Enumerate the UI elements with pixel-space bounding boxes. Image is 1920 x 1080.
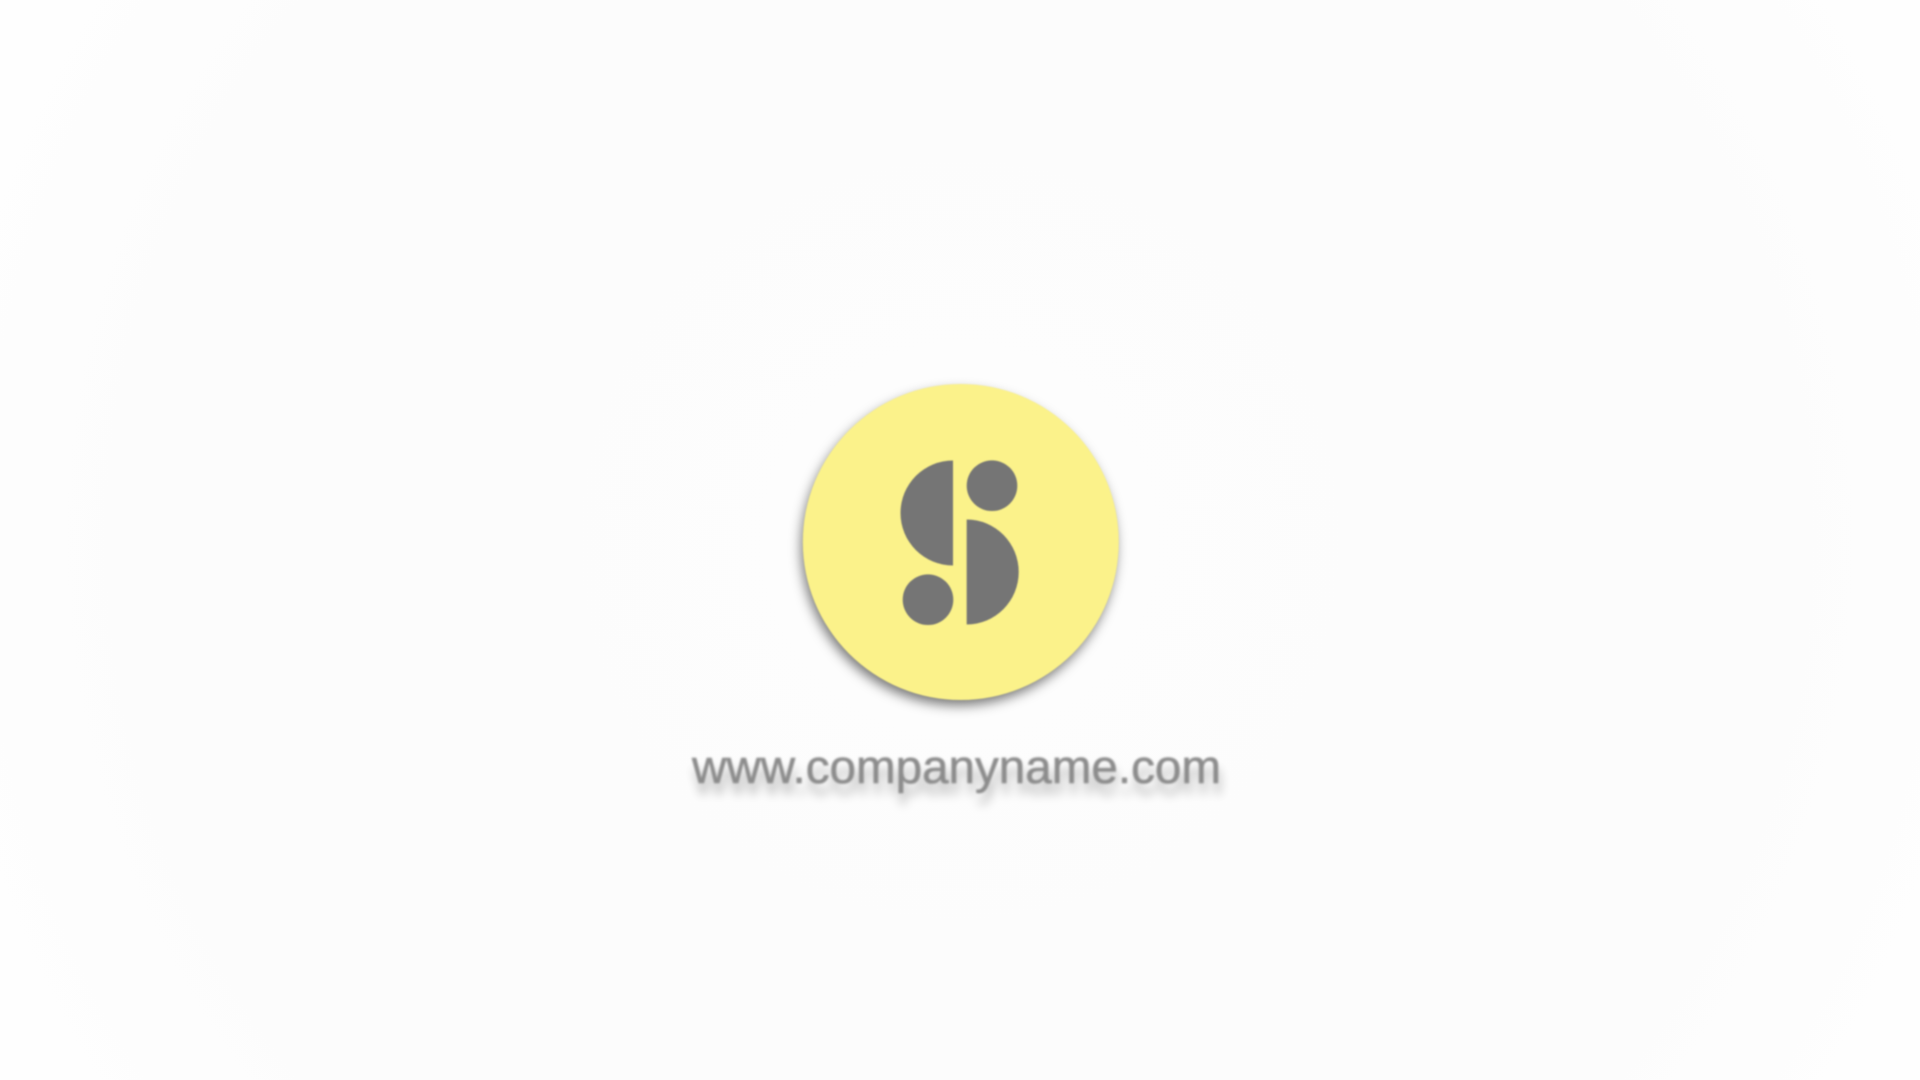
lower left dot: [903, 574, 953, 625]
icon: S mark: [901, 460, 1019, 625]
upper left half disc: [901, 460, 953, 566]
yellow circle: [803, 384, 1119, 700]
url text: www.companyname.com: [691, 741, 1221, 794]
badge shadow: [802, 391, 1116, 705]
logo badge: [802, 384, 1119, 705]
text shadow: www.companyname.com: [693, 752, 1223, 805]
website address: [691, 741, 1223, 805]
upper right dot: [967, 460, 1017, 511]
lower right half disc: [967, 520, 1019, 624]
